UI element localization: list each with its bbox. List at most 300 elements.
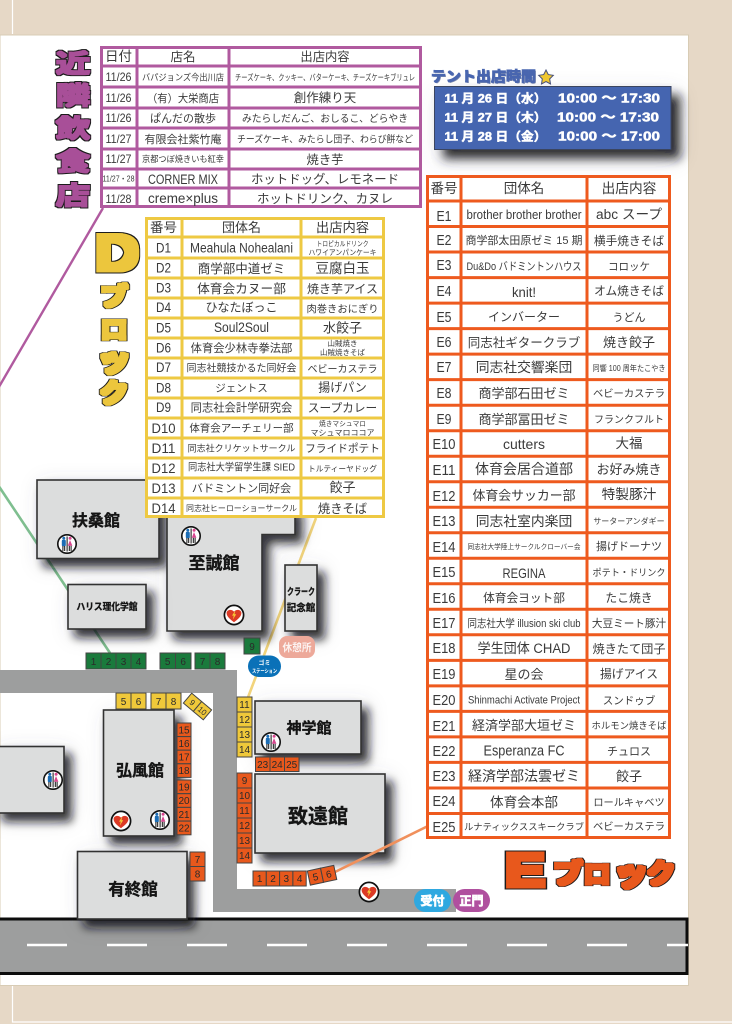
- row D4: 肉巻きおにぎり: [306, 302, 379, 316]
- row E8: [436, 386, 665, 402]
- icon: restroom 弘風館: [151, 811, 169, 829]
- row E4: オム焼きそば: [594, 285, 664, 298]
- building: 有終館: 有終館: [108, 880, 158, 899]
- heading: 近隣飲食店: 食: [56, 149, 90, 176]
- row E5: [436, 310, 646, 326]
- row E1: E1: [436, 209, 452, 225]
- row E7: 同響 100 周年たこやき: [592, 363, 666, 373]
- row D1: [156, 240, 376, 257]
- row E12: 体育会サッカー部: [472, 488, 576, 503]
- leader line: green: [0, 482, 110, 653]
- heading: Eブロック: ブ: [553, 859, 583, 889]
- row E21: 経済学部大垣ゼミ: [472, 718, 576, 733]
- header row: 出店内容: [602, 180, 657, 196]
- row E20: E20: [432, 693, 456, 709]
- row E4: knit!: [512, 284, 536, 300]
- building: 神学館: 神学館: [286, 719, 332, 737]
- row: 有限会社紫竹庵: チーズケーキ、みたらし団子、わらび餅など: [237, 134, 413, 146]
- row D13: バドミントン同好会: [192, 481, 291, 495]
- row: 有限会社紫竹庵: 有限会社紫竹庵: [144, 132, 222, 146]
- stalls: E block orange: 5: [312, 872, 320, 884]
- row E16: [432, 591, 653, 607]
- row D14: 焼きそば: [318, 502, 367, 516]
- header row: 出店内容: [316, 219, 369, 235]
- icon: restroom 扶桑館: [58, 535, 76, 553]
- stalls: E block orange: 2: [270, 874, 276, 885]
- row D10: マシュマロココア: [310, 428, 374, 438]
- row E19: 星の会: [504, 667, 544, 682]
- row E15: [432, 565, 666, 581]
- row D2: 豆腐白玉: [316, 261, 370, 276]
- row E7: E7: [436, 360, 452, 376]
- row E22: E22: [432, 744, 456, 760]
- row D3: [156, 280, 378, 296]
- row D5: [156, 320, 362, 336]
- row E7: [436, 360, 666, 376]
- row E25: [432, 820, 665, 836]
- stalls: E block orange: 21: [178, 810, 190, 821]
- row E11: [432, 461, 662, 479]
- row D8: 揚げパン: [318, 380, 367, 394]
- row D12: [152, 460, 377, 476]
- heading: 近隣飲食店: 飲: [56, 116, 90, 143]
- building: クラーク記念館: 記念館: [287, 602, 316, 614]
- hours: 11/26: 11 月 26 日（水）: [444, 90, 546, 106]
- row: バパジョンズ今出川店: 11/26: [106, 70, 132, 84]
- row: CORNER MIX: CORNER MIX: [148, 172, 218, 187]
- row D13: [152, 480, 356, 496]
- row D9: [156, 400, 377, 415]
- main road: [0, 919, 688, 974]
- row: 大栄商店: 創作練り天: [294, 91, 357, 105]
- row E9: 商学部冨田ゼミ: [478, 412, 570, 427]
- row D5: 水餃子: [323, 320, 362, 336]
- header row: 団体名: [222, 220, 261, 235]
- row E13: サーターアンダギー: [593, 516, 665, 526]
- row D1: トロピカルドリンク: [316, 240, 368, 248]
- row D6: [156, 338, 365, 357]
- icon: restroom west: [44, 771, 62, 789]
- building: 扶桑館: 扶桑館: [72, 512, 120, 530]
- hours: 11/28: [444, 128, 660, 144]
- label: ゴミステーション: ゴミ: [258, 659, 271, 667]
- row: 京都つぼ焼きいも紅幸: [106, 152, 343, 167]
- row E24: ロールキャベツ: [593, 797, 665, 809]
- row E21: E21: [432, 719, 456, 735]
- row D2: 商学部中道ゼミ: [198, 261, 285, 276]
- building: 至誠館: 至誠館: [188, 554, 240, 573]
- row E19: E19: [432, 667, 456, 683]
- row: 京都つぼ焼きいも紅幸: 11/27: [106, 152, 132, 166]
- row E21: ホルモン焼きそば: [591, 720, 667, 731]
- row E24: [432, 794, 665, 810]
- row: ぱんだの散歩: [106, 111, 408, 125]
- row D14: [152, 501, 367, 516]
- row E24: E24: [432, 794, 456, 810]
- row E12: E12: [432, 489, 456, 505]
- row D11: フライドポテト: [305, 443, 380, 455]
- label: 受付: [414, 889, 451, 912]
- row D3: 焼き芋アイス: [307, 282, 378, 296]
- row D7: [156, 360, 378, 376]
- row D5: D5: [156, 320, 171, 336]
- row: バパジョンズ今出川店: チーズケーキ、クッキー、バターケーキ、チーズケーキブリュレ: [235, 72, 415, 82]
- row D8: [156, 380, 367, 396]
- building: クラーク記念館: [285, 565, 317, 631]
- row: 有限会社紫竹庵: [106, 132, 413, 146]
- hours: 11/28: 11 月 28 日（金）: [444, 128, 546, 144]
- row D6: 山賊焼き: [328, 338, 358, 348]
- row D3: D3: [156, 280, 171, 296]
- heading: Dブロック: ッ: [97, 344, 131, 377]
- row E4: [436, 284, 664, 300]
- stalls: E block orange: 16: [178, 739, 190, 750]
- row D7: D7: [156, 360, 171, 375]
- row E2: E2: [436, 233, 452, 249]
- row E10: E10: [432, 437, 456, 453]
- row E3: E3: [436, 258, 452, 274]
- row E19: 揚げアイス: [600, 667, 658, 681]
- row: CORNER MIX: [102, 172, 399, 187]
- row E5: E5: [436, 310, 452, 326]
- stalls: D block yellow: 5: [121, 697, 127, 708]
- row: 大栄商店: （有）大栄商店: [147, 91, 219, 105]
- stalls: D block green: 2: [106, 657, 112, 668]
- row D11: D11: [152, 441, 176, 456]
- header row: 店名: [170, 49, 196, 64]
- row E23: 経済学部法雲ゼミ: [468, 768, 580, 784]
- row E5: インバーター: [488, 310, 560, 324]
- heading: Dブロック: [95, 225, 139, 408]
- row E16: たこ焼き: [605, 591, 653, 605]
- row: 有限会社紫竹庵: 11/27: [106, 132, 132, 146]
- row E22: チュロス: [607, 745, 651, 758]
- stalls: D block yellow: 8: [171, 697, 177, 708]
- row E6: 同志社ギタークラブ: [468, 335, 581, 350]
- stalls: E block orange: 13: [239, 836, 250, 847]
- row D4: D4: [156, 300, 171, 315]
- hours: 11/27: 10:00 ～ 17:30: [557, 110, 659, 124]
- row E23: 餃子: [616, 769, 642, 784]
- header row: 団体名: [504, 181, 544, 196]
- icon: restroom 神学館: [262, 733, 280, 751]
- stalls: D block yellow: 7: [156, 697, 162, 708]
- row D2: D2: [156, 260, 171, 276]
- row E2: 商学部太田原ゼミ 15 期: [466, 233, 582, 247]
- row E14: 揚げドーナツ: [596, 540, 662, 553]
- row E8: ベビーカステラ: [593, 388, 665, 400]
- building: ハリス理化学館: [68, 584, 146, 629]
- row D10: 体育会アーチェリー部: [189, 422, 294, 434]
- stalls: E block orange: 25: [286, 760, 298, 771]
- stalls: E block orange: 8: [195, 870, 201, 880]
- row E14: E14: [432, 540, 456, 556]
- header row: [150, 219, 369, 235]
- row E13: E13: [432, 514, 456, 530]
- row: creme×plus: creme×plus: [148, 191, 218, 206]
- row D11: [152, 441, 380, 456]
- row E23: [432, 768, 642, 785]
- building: 有終館: [78, 852, 187, 919]
- label: 休憩所: 休憩所: [282, 641, 312, 654]
- row D11: 同志社クリケットサークル: [188, 442, 295, 454]
- row E15: REGINA: [502, 565, 546, 581]
- row: ぱんだの散歩: みたらしだんご、おしるこ、どらやき: [242, 112, 408, 125]
- stalls: D block green: 7: [200, 657, 206, 668]
- building: 扶桑館: [37, 480, 159, 558]
- row: CORNER MIX: ホットドッグ、レモネード: [251, 172, 399, 186]
- stalls: D block yellow: 11: [239, 700, 250, 711]
- label: 正門: [453, 889, 490, 912]
- row: ぱんだの散歩: 11/26: [106, 111, 132, 125]
- row E25: ベビーカステラ: [593, 821, 665, 833]
- row E18: [432, 641, 666, 657]
- hours: 11/27: [444, 110, 659, 124]
- stalls: D block green: 4: [136, 657, 142, 668]
- row: creme×plus: [106, 191, 393, 206]
- row: creme×plus: 11/28: [106, 192, 132, 206]
- row E10: cutters: [503, 436, 545, 452]
- hours: 11/27: 11 月 27 日（木）: [444, 110, 546, 124]
- leader line: purple: [0, 208, 103, 392]
- row D3: 体育会カヌー部: [197, 281, 286, 296]
- stalls: D block yellow: 13: [239, 730, 250, 741]
- header row: 出店内容: [300, 50, 350, 64]
- icon: star: [539, 70, 553, 84]
- stalls: E block orange: 10: [239, 791, 250, 802]
- row E17: 同志社大学 illusion ski club: [468, 616, 580, 630]
- heading: Eブロック: E: [505, 845, 545, 896]
- row D2: [156, 260, 370, 276]
- stalls: D block green: 9: [249, 642, 255, 653]
- row E2: 横手焼きそば: [594, 234, 664, 248]
- building: 弘風館: [104, 710, 174, 836]
- label: ゴミステーション: [248, 656, 281, 677]
- stalls: D block green: 6: [180, 657, 186, 668]
- hours: 11/28: 10:00 ～ 17:00: [558, 128, 660, 144]
- row E15: ポテト・ドリンク: [592, 568, 666, 579]
- row D6: 体育会少林寺拳法部: [191, 341, 292, 355]
- building: unnamed west: [0, 746, 64, 813]
- row D7: 同志社競技かるた同好会: [186, 362, 296, 374]
- stalls: D block yellow: 10: [196, 705, 209, 718]
- row D1: D1: [156, 240, 171, 256]
- stalls: E block orange: 4: [297, 874, 303, 885]
- table: D block: [146, 218, 384, 517]
- heading: Eブロック: ッ: [613, 857, 649, 893]
- heading: Dブロック: ロ: [100, 318, 128, 344]
- leader line: yellow: [247, 518, 316, 700]
- row E10: [432, 436, 642, 453]
- table: nearby restaurants: [101, 47, 421, 207]
- row D6: 山賊焼きそば: [320, 347, 365, 357]
- row E8: E8: [436, 386, 452, 402]
- stalls: E block orange: 23: [257, 760, 269, 771]
- row E11: E11: [432, 463, 456, 479]
- row E24: 体育会本部: [490, 795, 558, 810]
- row E22: Esperanza FC: [484, 744, 564, 760]
- row: 大栄商店: 11/26: [106, 91, 132, 105]
- row: creme×plus: ホットドリンク、カヌレ: [257, 192, 393, 206]
- row E13: [432, 514, 665, 530]
- stalls: E block orange: 24: [272, 760, 283, 771]
- row E20: Shinmachi Activate Project: [468, 694, 580, 706]
- heading: Eブロック: [505, 845, 675, 896]
- row D1: ハワイアンパンケーキ: [308, 248, 376, 257]
- row E23: E23: [432, 769, 456, 785]
- row E16: E16: [432, 591, 456, 607]
- row E6: [436, 335, 655, 351]
- heading: 近隣飲食店: 近: [56, 51, 90, 78]
- campus path: [0, 670, 456, 912]
- icon: AED 至誠館: [224, 605, 244, 625]
- row D8: ジェントス: [215, 382, 268, 394]
- row D13: 餃子: [329, 480, 356, 495]
- building: 神学館: [255, 701, 361, 754]
- stalls: D block green: 8: [215, 657, 221, 668]
- row D9: D9: [156, 400, 171, 415]
- row E3: コロッケ: [608, 261, 650, 273]
- row E2: [436, 233, 664, 249]
- row E20: スンドゥブ: [603, 694, 656, 707]
- hours: 11/26: 10:00 ～ 17:30: [558, 90, 660, 106]
- row E3: [436, 258, 650, 274]
- row D6: D6: [156, 340, 171, 356]
- stalls: E block orange: 14: [239, 851, 250, 862]
- row E17: [432, 616, 666, 632]
- leader line: orange: [335, 826, 428, 872]
- heading: 近隣飲食店: 隣: [56, 83, 90, 110]
- building: ハリス理化学館: ハリス理化学館: [76, 601, 138, 613]
- row D10: 焼きマシュマロ: [319, 419, 366, 428]
- header row: 番号: [430, 181, 458, 196]
- row E25: E25: [432, 820, 456, 836]
- row: ぱんだの散歩: ぱんだの散歩: [150, 111, 216, 125]
- row D1: Meahula Nohealani: [190, 240, 293, 256]
- row E9: [436, 412, 664, 428]
- row E20: [432, 693, 656, 709]
- row D12: D12: [152, 461, 176, 476]
- row D14: D14: [152, 501, 176, 516]
- row E22: [432, 744, 651, 760]
- row E25: ルナティックススキークラブ: [464, 821, 584, 832]
- row D13: D13: [152, 481, 176, 496]
- panel: tent hours: [434, 86, 671, 150]
- row D4: ひなたぼっこ: [205, 300, 278, 314]
- row D12: トルティーヤドッグ: [308, 464, 377, 474]
- row: 大栄商店: [106, 91, 357, 105]
- row E6: 焼き餃子: [603, 335, 655, 350]
- icon: restroom 至誠館: [182, 527, 200, 545]
- icon: AED 弘風館: [111, 811, 131, 831]
- building: クラーク記念館: クラーク: [287, 587, 315, 598]
- row E18: E18: [432, 641, 456, 657]
- row E15: E15: [432, 565, 456, 581]
- row E14: [432, 540, 662, 556]
- row E6: E6: [436, 335, 452, 351]
- row D9: 同志社会計学研究会: [191, 400, 292, 414]
- row E13: 同志社室内楽団: [476, 514, 572, 529]
- row D10: [152, 419, 374, 438]
- row E11: お好み焼き: [596, 462, 662, 477]
- row E11: 体育会居合道部: [475, 461, 573, 477]
- label: 休憩所: [279, 636, 315, 658]
- row: 京都つぼ焼きいも紅幸: 焼き芋: [307, 153, 343, 167]
- row E1: abc スープ: [596, 207, 662, 222]
- row E17: 大豆ミート豚汁: [592, 617, 666, 630]
- icon: AED entrance: [359, 882, 379, 902]
- stalls: E block orange: 12: [239, 821, 250, 832]
- row E18: 学生団体 CHAD: [478, 641, 571, 656]
- row D9: スープカレー: [308, 402, 377, 415]
- header row: [105, 49, 350, 64]
- label: ゴミステーション: ステーション: [252, 668, 277, 675]
- row: バパジョンズ今出川店: バパジョンズ今出川店: [142, 72, 224, 82]
- heading: Dブロック: ク: [100, 380, 128, 408]
- row E8: 商学部石田ゼミ: [478, 386, 570, 401]
- stalls: D block green: 5: [165, 657, 171, 668]
- row E12: 特製豚汁: [602, 487, 657, 502]
- heading: 近隣飲食店: 店: [56, 183, 90, 210]
- heading: Eブロック: ク: [647, 859, 675, 889]
- row E10: 大福: [616, 436, 642, 451]
- row: 京都つぼ焼きいも紅幸: 京都つぼ焼きいも紅幸: [142, 154, 224, 164]
- row E14: 同志社大学陸上サークルクローバー会: [468, 542, 580, 551]
- stalls: E block orange: 22: [178, 824, 190, 834]
- header row: 番号: [150, 220, 177, 235]
- header row: 日付: [105, 49, 132, 64]
- building: 至誠館: [167, 505, 295, 631]
- heading: 近隣飲食店: [56, 51, 90, 210]
- row D5: Soul2Soul: [214, 320, 269, 335]
- row E1: [436, 207, 662, 225]
- building: 弘風館: 弘風館: [116, 762, 164, 780]
- heading: Eブロック: ロ: [583, 860, 611, 889]
- row E19: [432, 667, 658, 683]
- stalls: E block orange: 1: [257, 874, 263, 885]
- header row: [430, 180, 657, 196]
- stalls: E block orange: 19: [178, 782, 190, 794]
- row D7: ベビーカステラ: [308, 364, 378, 376]
- row E9: フランクフルト: [594, 414, 664, 426]
- stalls: E block orange: 7: [195, 855, 201, 866]
- stalls: D block yellow: [116, 693, 252, 757]
- stalls: D block green: 1: [91, 657, 97, 668]
- row: バパジョンズ今出川店: [106, 70, 415, 84]
- heading: Dブロック: ブ: [100, 283, 128, 311]
- building: 致遠館: 致遠館: [288, 805, 348, 828]
- stalls: E block orange: 6: [325, 869, 333, 881]
- label: 正門: 正門: [459, 894, 484, 908]
- row E16: 体育会ヨット部: [483, 591, 565, 605]
- stalls: E block orange: 15: [178, 726, 190, 736]
- stalls: D block green: 3: [121, 657, 127, 668]
- row D10: D10: [152, 421, 176, 436]
- hours: 11/26: [444, 90, 660, 106]
- building: 致遠館: [255, 774, 385, 853]
- stalls: D block yellow: 6: [136, 697, 142, 708]
- stalls: D block green: [86, 638, 260, 669]
- table: E block: [427, 176, 670, 838]
- stalls: E block orange: 20: [178, 796, 190, 807]
- row E4: E4: [436, 284, 452, 300]
- row E21: [432, 718, 667, 735]
- row E12: [432, 487, 657, 505]
- stalls: E block orange: 11: [239, 806, 250, 817]
- row D8: D8: [156, 380, 171, 396]
- stalls: E block orange: 17: [178, 752, 190, 764]
- row E9: E9: [436, 412, 452, 428]
